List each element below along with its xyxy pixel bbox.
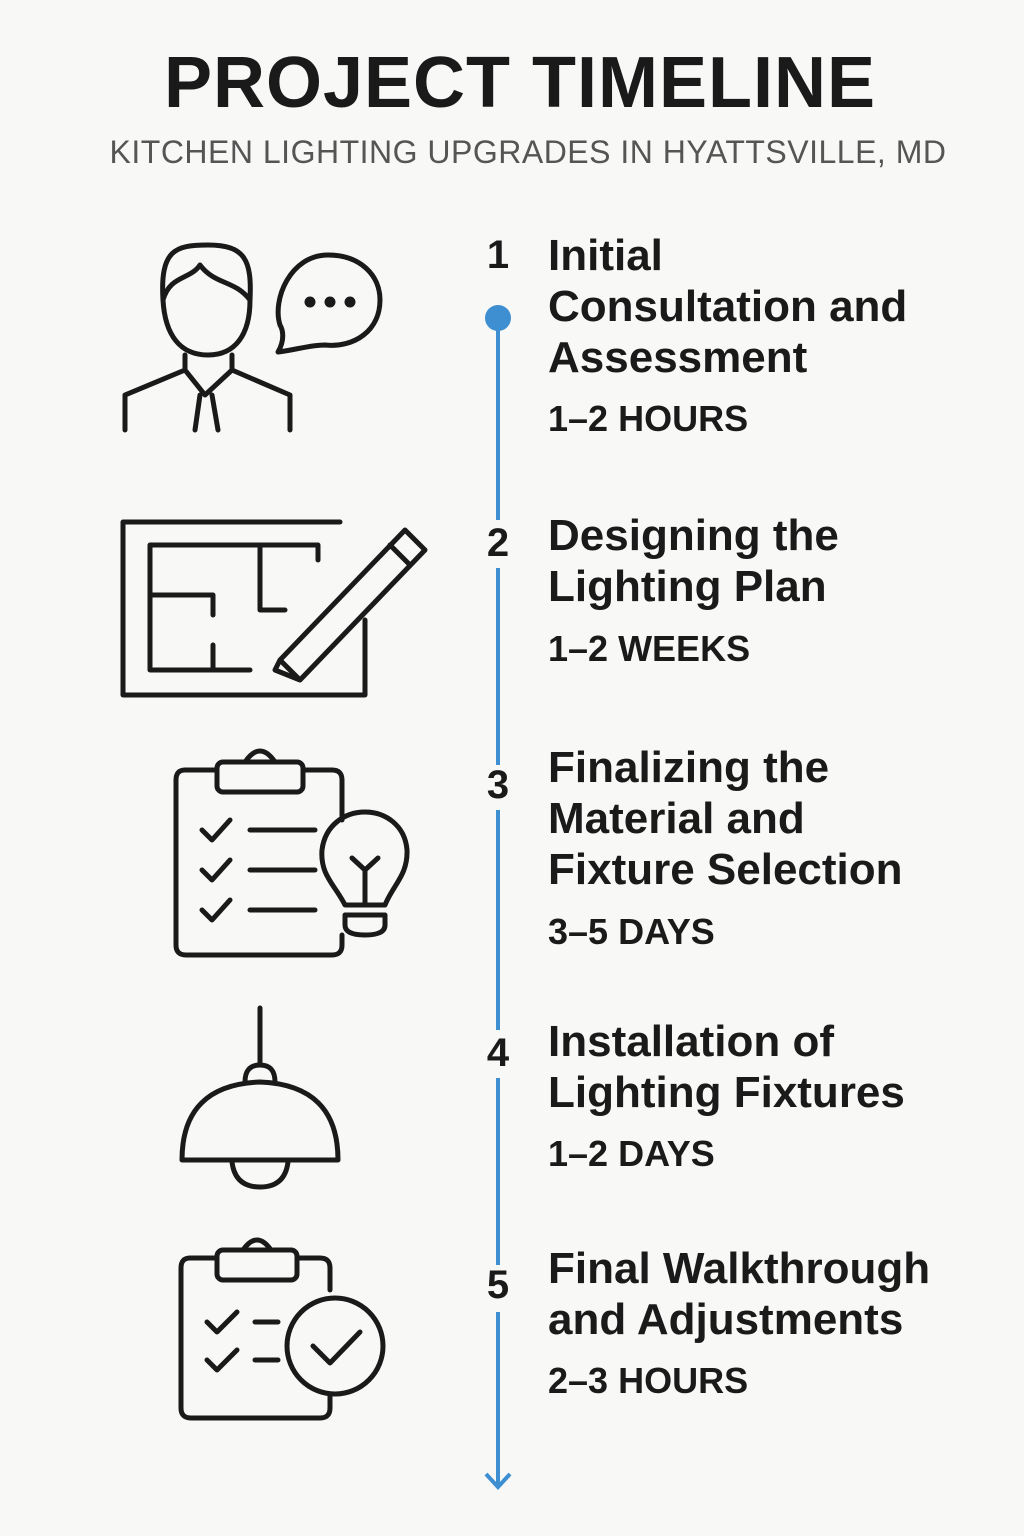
step 2 <box>487 511 839 669</box>
text: Initial <box>548 231 663 280</box>
text: 1–2 DAYS <box>548 1133 715 1174</box>
text: 3 <box>487 763 509 807</box>
step 1 <box>487 231 907 439</box>
text: 5 <box>487 1263 509 1307</box>
text: Lighting Plan <box>548 562 827 611</box>
text: Designing the <box>548 511 839 560</box>
text: 1–2 WEEKS <box>548 628 750 669</box>
text: and Adjustments <box>548 1295 903 1344</box>
text: Final Walkthrough <box>548 1244 930 1293</box>
subtitle: KITCHEN LIGHTING UPGRADES IN HYATTSVILLE, MD <box>110 134 946 170</box>
text: 4 <box>487 1031 509 1075</box>
text: Material and <box>548 794 805 843</box>
text: Fixture Selection <box>548 845 903 894</box>
step 3 <box>487 743 903 952</box>
text: 2 <box>487 521 509 565</box>
step 5 <box>487 1244 930 1401</box>
text: 1 <box>487 233 509 277</box>
text: Finalizing the <box>548 743 829 792</box>
text: Consultation and <box>548 282 907 331</box>
text: Lighting Fixtures <box>548 1068 905 1117</box>
text: Assessment <box>548 333 807 382</box>
title: PROJECT TIMELINE <box>164 43 876 123</box>
text: 3–5 DAYS <box>548 911 715 952</box>
text: 2–3 HOURS <box>548 1360 748 1401</box>
text: 1–2 HOURS <box>548 398 748 439</box>
text: Installation of <box>548 1017 834 1066</box>
step 4 <box>487 1017 905 1174</box>
